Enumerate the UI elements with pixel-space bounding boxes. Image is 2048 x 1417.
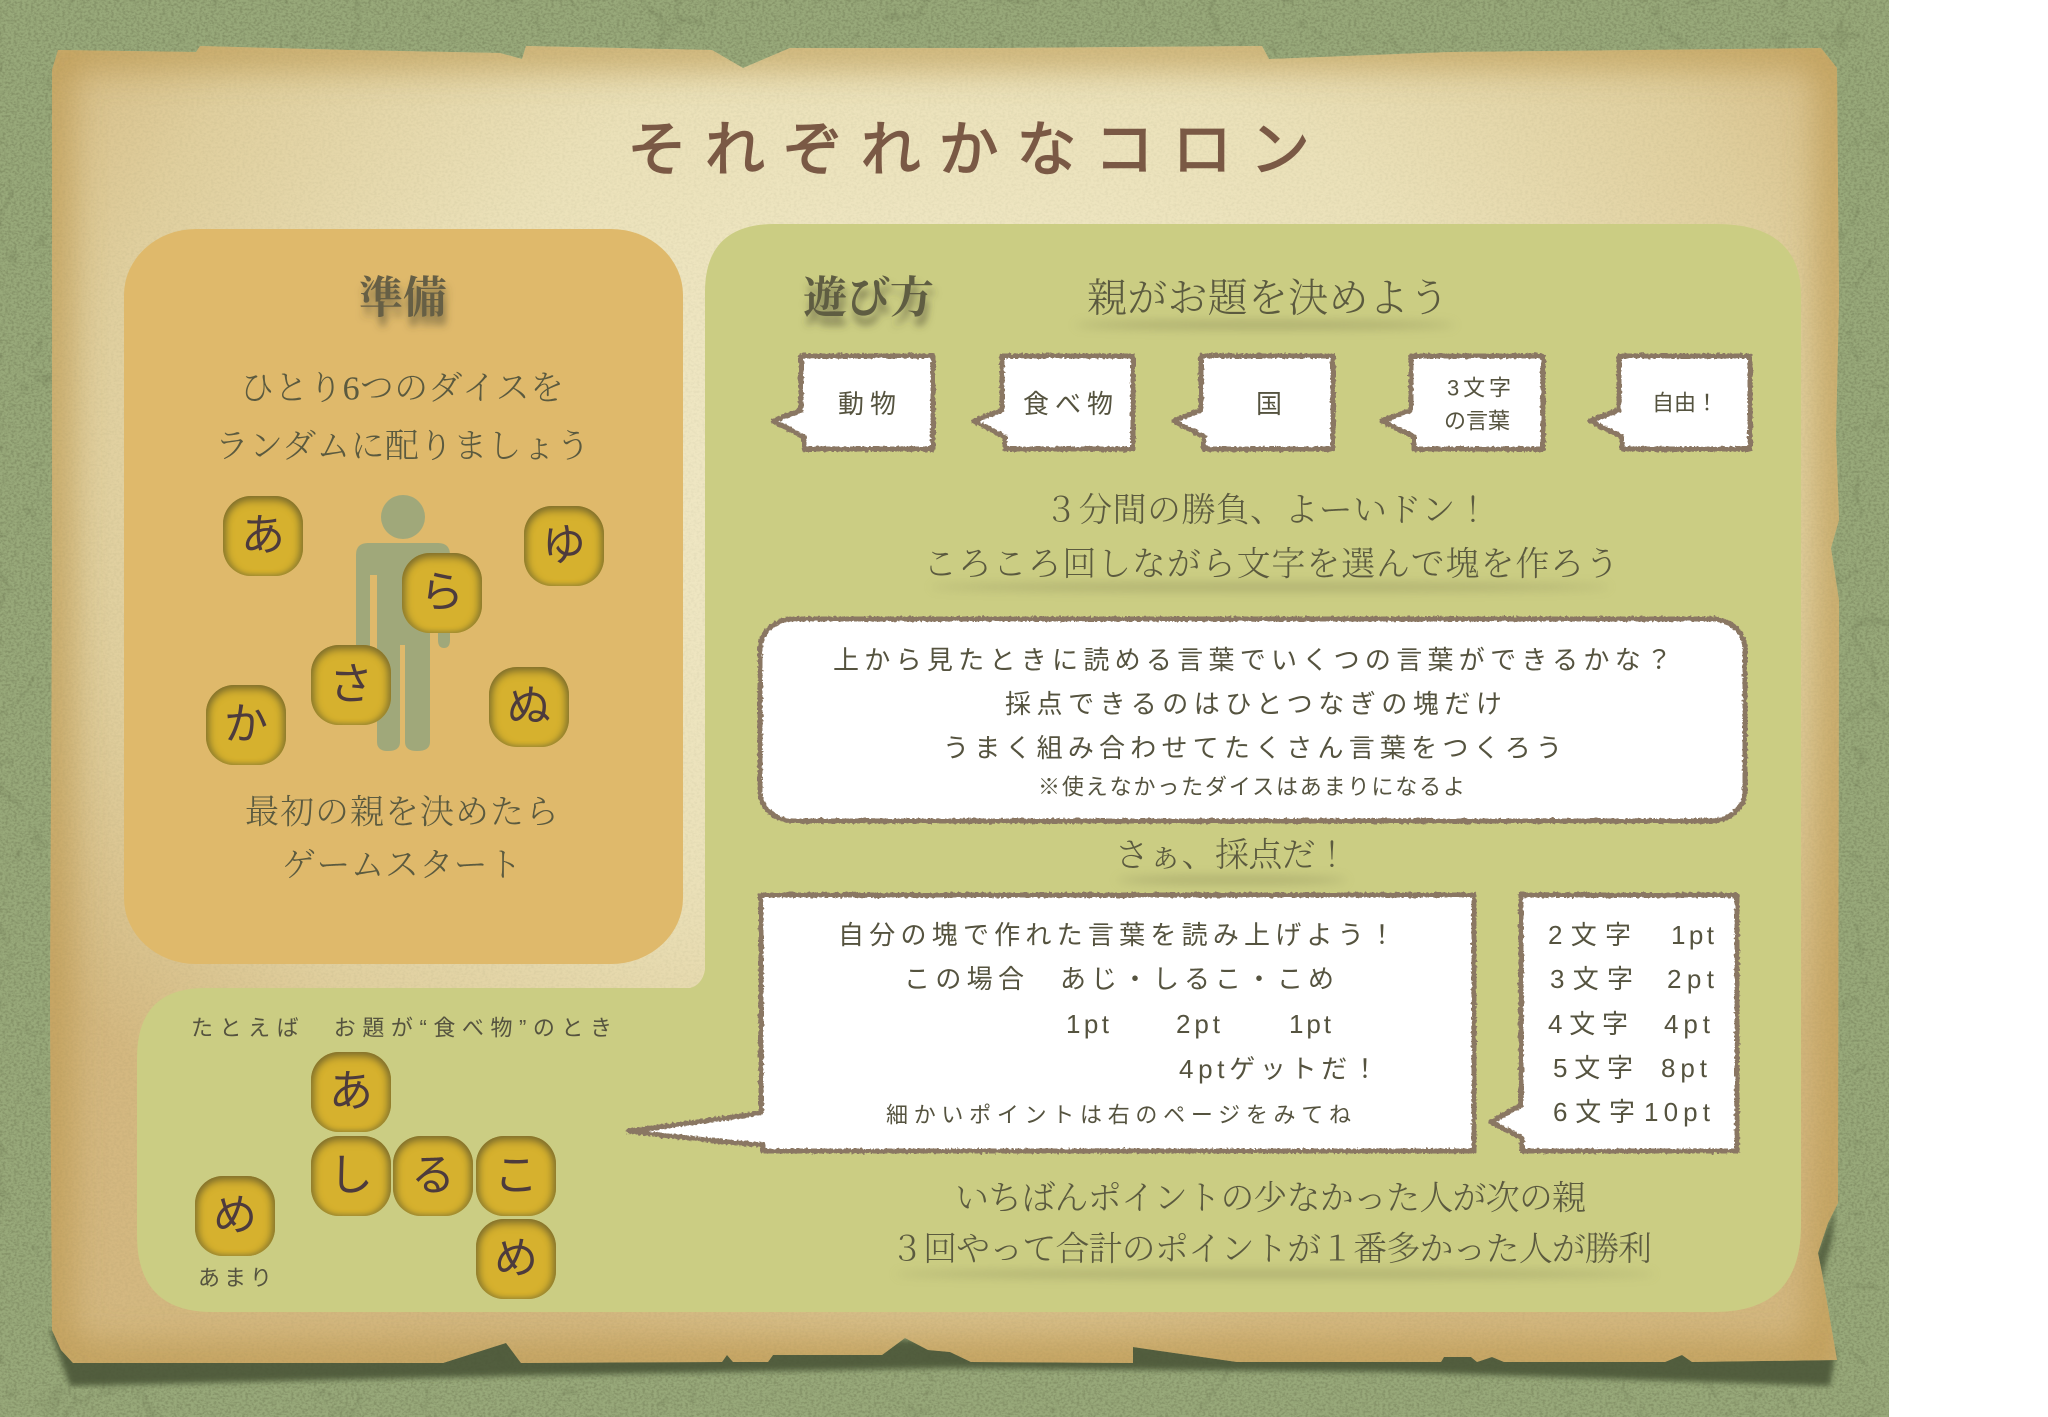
callout: scoring example [628,895,1474,1151]
panel: preparation [124,229,683,964]
text: scoring heading: さぁ、採点だ！ [1115,836,1349,874]
text: setup instructions: ひとり6つのダイスを [240,370,564,408]
bubble: food [974,356,1133,449]
heading: preparation: 準備 [359,274,447,322]
bubble: free [1590,356,1750,449]
callout: scoring example: 細かいポイントは右のページをみてね [886,1102,1351,1128]
die: a [223,496,303,576]
text: parent picks topic: 親がお題を決めよう [1087,276,1449,320]
text: example caption: たとえば お題が“食べ物”のとき [191,1016,612,1040]
callout: scoring example: 1pt [1289,1009,1332,1039]
callout: scoring example: 4ptゲットだ！ [1179,1054,1378,1084]
callout: points table: 6文字 [1553,1097,1635,1127]
heading: how to play: 遊び方 [803,274,934,322]
text: start game: 最初の親を決めたら [245,794,559,832]
callout: rules: 上から見たときに読める言葉でいくつの言葉ができるかな？ [833,645,1672,675]
bubble: food: 食べ物 [1023,389,1113,419]
panel: how to play [137,224,1801,1312]
dice: setup [206,496,604,765]
die: sa [311,645,391,725]
die: leftover me: め [213,1191,257,1240]
callout: scoring example: あじ・しるこ・こめ [1060,964,1334,994]
callout: points table: 3文字 [1550,964,1633,994]
dice: word example [195,1052,556,1299]
text: winner rules: ３回やって合計のポイントが１番多かった人が勝利 [890,1230,1652,1268]
bubble: animals: 動物 [838,389,896,419]
die: a [311,1052,391,1132]
bubble: animals [773,356,933,449]
callout: points table: 2文字 [1548,920,1631,950]
die: a: あ [241,511,285,560]
callout: rules: ※使えなかったダイスはあまりになるよ [1038,774,1465,800]
die: nu [489,667,569,747]
die: yu: ゆ [542,521,586,570]
die: ko: こ [494,1151,538,1200]
callout: rules [760,619,1745,821]
callout: points table: 4文字 [1548,1009,1628,1039]
callout: points table: 5文字 [1553,1053,1633,1083]
icon: person [356,495,450,751]
die: a: あ [329,1067,373,1116]
callout: points table [1491,895,1737,1151]
text: three minute round: ころころ回しながら文字を選んで塊を作ろう [923,546,1619,584]
text: setup instructions [215,370,590,466]
callout: points table: 2pt [1667,964,1715,994]
die: ru: る [411,1151,455,1200]
callout: scoring example: 1pt [1066,1009,1110,1039]
text: start game [245,794,559,884]
callout: points table: 1pt [1671,920,1715,950]
die: yu [524,506,604,586]
callout: scoring example: この場合 [904,964,1024,994]
text: winner rules: いちばんポイントの少なかった人が次の親 [955,1180,1586,1218]
title: それぞれかなコロン [627,116,1310,184]
die: shi [311,1136,391,1216]
callout: points table: 10pt [1644,1097,1711,1127]
callout: points table: 4pt [1664,1009,1711,1039]
callout: points table: 8pt [1661,1053,1708,1083]
callout: rules: うまく組み合わせてたくさん言葉をつくろう [943,733,1562,763]
bubble: country: 国 [1256,389,1282,419]
text: three minute round: ３分間の勝負、よーいドン！ [1044,492,1490,530]
text: setup instructions: ランダムに配りましょう [215,428,590,466]
die: shi: し [329,1151,373,1200]
callout: rules: 採点できるのはひとつなぎの塊だけ [1005,689,1502,719]
die: ra: ら [420,568,464,617]
die: ko [476,1136,556,1216]
bubble: three-letter words: 3文字 [1447,376,1511,400]
die: leftover me [195,1176,275,1256]
text: three minute round [923,492,1619,591]
text: winner rules [890,1180,1655,1278]
die: ka: か [224,700,268,749]
bubble: three-letter words: の言葉 [1444,408,1510,434]
die: me: め [494,1234,538,1283]
text: leftover label: あまり [198,1266,272,1290]
text: start game: ゲームスタート [282,848,522,884]
bubble: free: 自由！ [1652,390,1718,416]
callout: scoring example: 自分の塊で作れた言葉を読み上げよう！ [838,920,1395,950]
bubble: three-letter words [1382,356,1543,449]
callout: scoring example: 2pt [1176,1009,1221,1039]
die: nu: ぬ [507,682,551,731]
die: ka [206,685,286,765]
die: sa: さ [329,660,373,709]
die: me [476,1219,556,1299]
die: ra [402,553,482,633]
bubble: country [1174,356,1333,449]
die: ru [393,1136,473,1216]
